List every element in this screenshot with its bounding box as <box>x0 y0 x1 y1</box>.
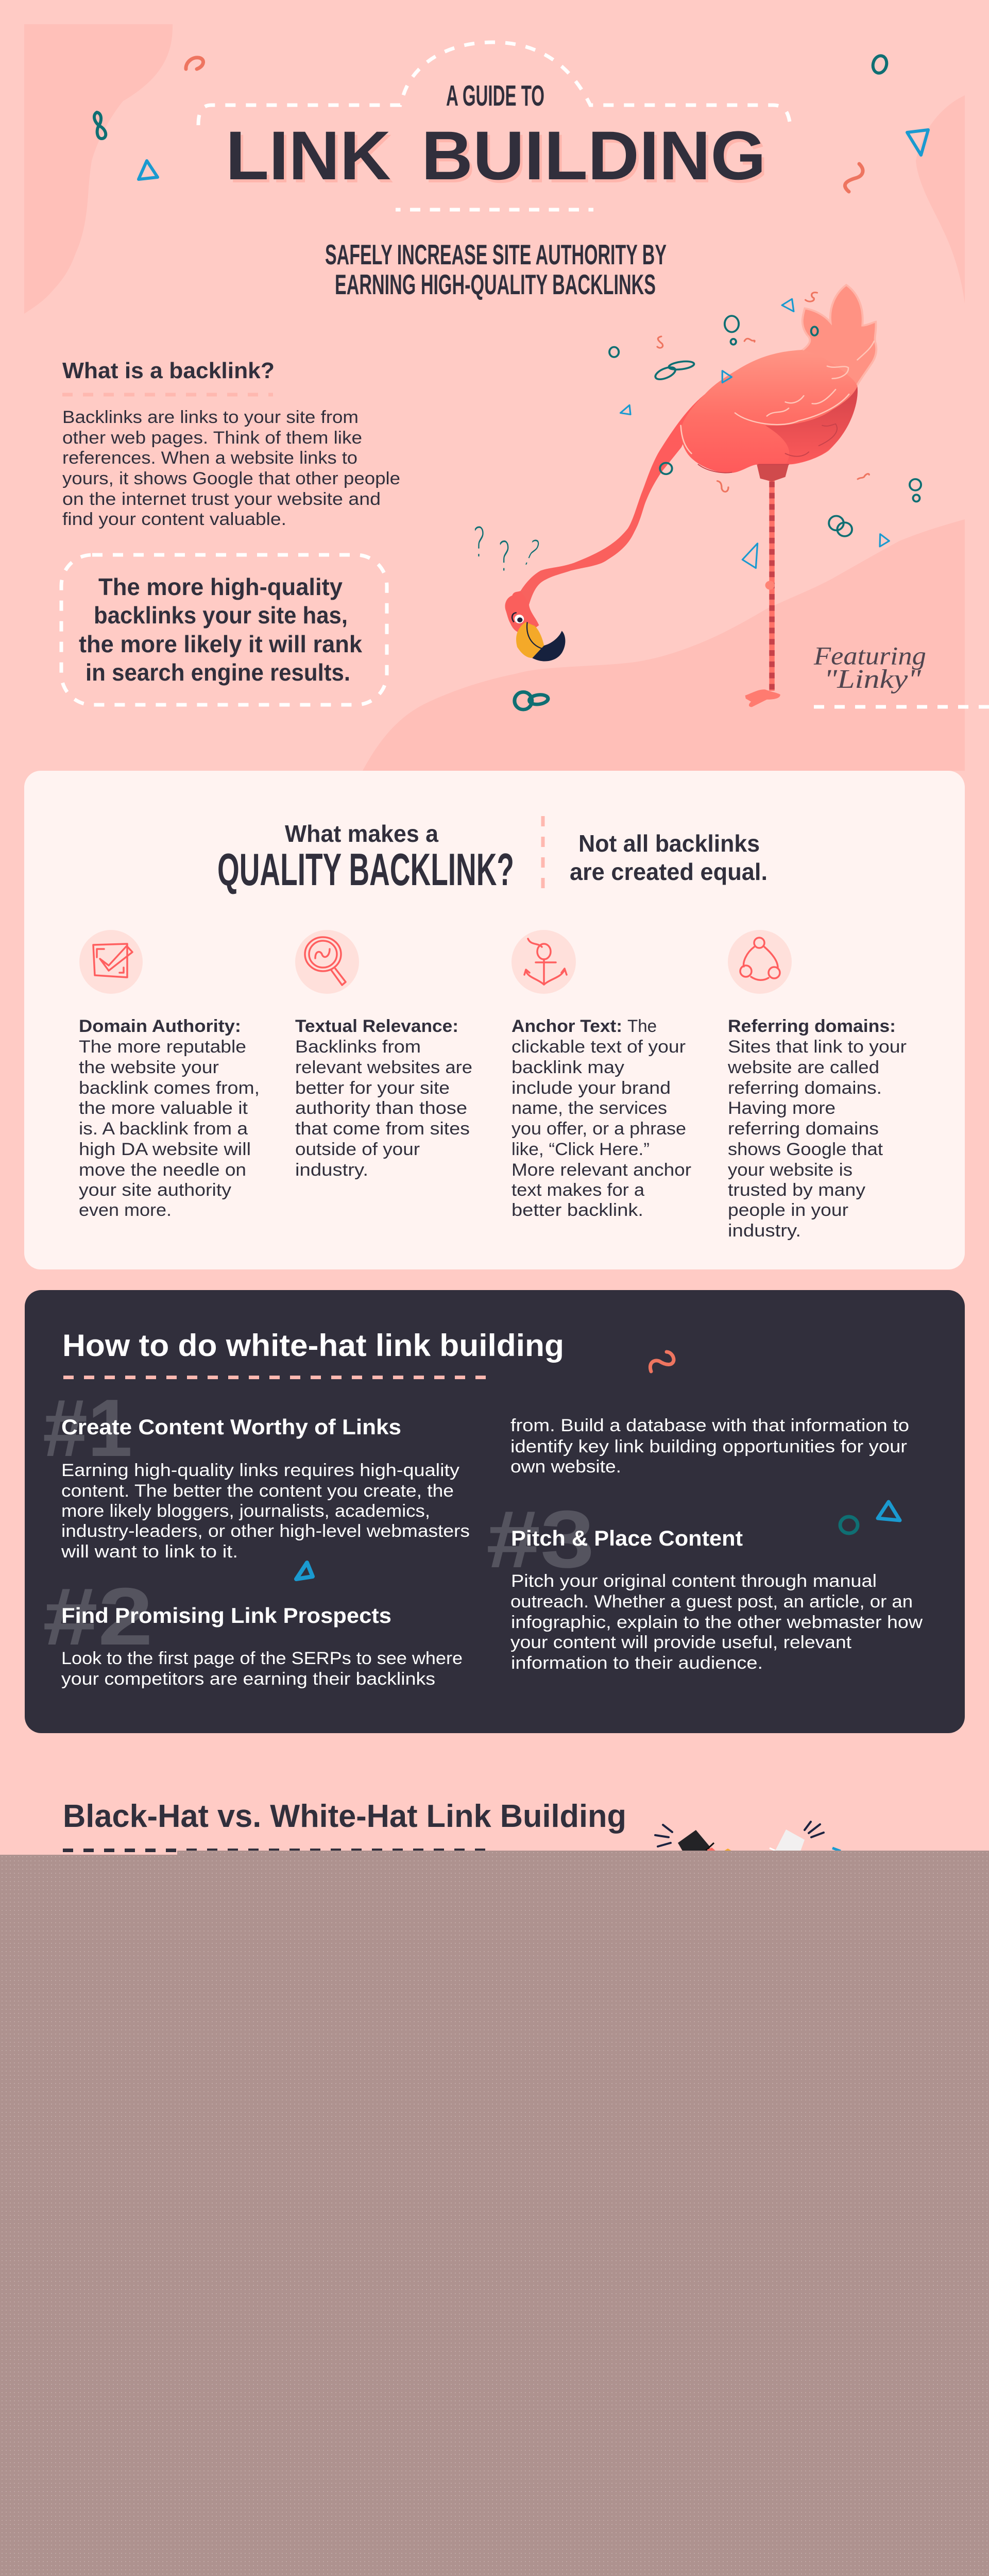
dashed title frame <box>198 42 790 125</box>
decorative blob: top right <box>916 95 965 303</box>
panel: how to do white-hat link building <box>25 1290 965 1733</box>
step 2 text <box>61 1416 909 1689</box>
heading: link building: LINK <box>226 117 391 194</box>
text: anchor text: better backlink. <box>511 1200 643 1220</box>
icon: referring domains network <box>728 930 792 994</box>
question marks: ? <box>518 532 545 575</box>
side note <box>570 830 768 885</box>
decorative blob: bottom right hill <box>363 519 965 771</box>
text: textual relevance: Textual Relevance: <box>295 1016 458 1036</box>
icon: anchor <box>511 930 576 994</box>
text: referring domains: referring domains. <box>728 1078 882 1098</box>
text: textual relevance: Backlinks from <box>295 1037 421 1057</box>
signature: featuring Linky: Featuring <box>813 642 926 670</box>
question marks <box>473 519 545 581</box>
step 2 text: your competitors are earning their backlinks <box>61 1669 435 1689</box>
text: textual relevance: that come from sites <box>295 1119 470 1139</box>
beak <box>516 622 565 661</box>
unrendered lower area <box>0 1851 989 2576</box>
title block <box>198 42 790 300</box>
heading: link building: BUILDING <box>421 117 766 194</box>
step 1 text: more likely bloggers, journalists, academics, <box>61 1501 430 1521</box>
text: domain authority: high DA website will <box>79 1140 251 1159</box>
dashed title rule <box>396 208 593 211</box>
step 1 heading: Create Content Worthy of Links <box>61 1415 401 1439</box>
text: domain authority: the more valuable it <box>79 1098 248 1118</box>
text: domain authority: is. A backlink from a <box>79 1119 248 1139</box>
step 1 text: Earning high-quality links requires high-quality <box>61 1461 459 1480</box>
illustration: flamingo Linky <box>473 285 926 709</box>
text: referring domains: shows Google that <box>728 1140 883 1159</box>
heading: quality backlink: QUALITY BACKLINK? <box>217 844 514 895</box>
step 1 text: will want to link to it. <box>61 1542 238 1562</box>
text: textual relevance: outside of your <box>295 1140 420 1159</box>
text: textual relevance <box>295 1016 472 1180</box>
what is a backlink <box>62 358 400 529</box>
question marks: ? <box>498 534 511 581</box>
head <box>505 591 539 633</box>
text: anchor text <box>511 1016 691 1220</box>
eye <box>512 613 524 623</box>
heading: How to do white-hat link building <box>62 1328 564 1363</box>
text: referring domains: industry. <box>728 1221 801 1241</box>
text: domain authority: your site authority <box>79 1180 231 1200</box>
text: textual relevance: better for your site <box>295 1078 450 1098</box>
panel: quality backlink <box>24 771 965 1269</box>
description: other web pages. Think of them like <box>62 428 362 448</box>
step 3 text: Pitch your original content through manual <box>511 1571 877 1591</box>
step 3 text <box>510 1571 923 1673</box>
callout: more backlinks: backlinks your site has, <box>94 602 348 629</box>
text: referring domains: Having more <box>728 1098 835 1118</box>
signature: featuring Linky: "Linky" <box>824 664 921 693</box>
icon: domain authority checklist <box>79 930 143 994</box>
text: domain authority: The more reputable <box>79 1037 246 1057</box>
text: anchor text: Anchor Text: <box>511 1016 622 1036</box>
step 3 text: outreach. Whether a guest post, an article, or an <box>510 1592 913 1612</box>
number 2: #2 <box>43 1571 153 1662</box>
leg <box>745 479 780 707</box>
dashed divider <box>541 816 545 888</box>
header doodles <box>94 54 928 192</box>
text: anchor text: clickable text of your <box>511 1037 686 1057</box>
text: anchor text: The <box>627 1016 657 1036</box>
number 1: #1 <box>43 1383 132 1473</box>
text: referring domains: people in your <box>728 1200 848 1220</box>
text: referring domains <box>727 1016 907 1241</box>
dashed rule: black-hat section <box>63 1849 486 1852</box>
hip <box>757 464 789 482</box>
step 2 text: from. Build a database with that information to <box>510 1416 909 1435</box>
callout: more backlinks: The more high-quality <box>98 573 343 600</box>
doodles: squiggles <box>657 293 869 492</box>
description: find your content valuable. <box>62 510 286 529</box>
text: domain authority: Domain Authority: <box>79 1016 241 1036</box>
heading: link building: LINK <box>228 121 394 197</box>
callout: more backlinks: in search engine results. <box>86 659 350 686</box>
step 3 text: information to their audience. <box>511 1653 763 1673</box>
description: yours, it shows Google that other people <box>62 469 400 488</box>
step 1 text <box>61 1461 470 1562</box>
decorative blob: top left <box>24 24 173 314</box>
doodles: rings <box>515 316 921 709</box>
step 3 text: your content will provide useful, relevant <box>510 1633 852 1652</box>
text: textual relevance: industry. <box>295 1160 368 1180</box>
doodles: triangles <box>620 299 889 568</box>
under-wing lines <box>698 424 837 473</box>
illustration: black hat <box>655 1825 735 1853</box>
step 2 heading: Find Promising Link Prospects <box>61 1603 391 1628</box>
description: references. When a website links to <box>62 448 357 468</box>
doodles <box>296 1352 900 1579</box>
text: anchor text: More relevant anchor <box>511 1160 691 1180</box>
step 1 text: content. The better the content you create, the <box>61 1481 454 1501</box>
feather lines <box>681 341 874 453</box>
neck <box>521 394 705 605</box>
subtitle <box>325 239 667 300</box>
description: Backlinks are links to your site from <box>62 408 359 427</box>
text: anchor text: you offer, or a phrase <box>511 1119 686 1139</box>
text: referring domains: Referring domains: <box>728 1016 896 1036</box>
question marks: ? <box>473 519 486 567</box>
step 3 text: infographic, explain to the other webmaster how <box>511 1613 923 1632</box>
step 2 text: Look to the first page of the SERPs to see where <box>61 1649 463 1668</box>
icon: textual relevance magnifier <box>295 930 359 994</box>
text: textual relevance: relevant websites are <box>295 1058 472 1077</box>
text: anchor text: like, “Click Here.” <box>511 1140 650 1159</box>
text: domain authority: move the needle on <box>79 1160 246 1180</box>
heading: link building: BUILDING <box>424 121 769 197</box>
subtitle: EARNING HIGH-QUALITY BACKLINKS <box>335 268 656 300</box>
body <box>681 350 857 473</box>
side note: Not all backlinks <box>578 830 760 857</box>
heading: what makes a: What makes a <box>285 820 438 847</box>
text: referring domains: trusted by many <box>728 1180 865 1200</box>
text: anchor text: name, the services <box>511 1098 667 1118</box>
text: domain authority: backlink comes from, <box>79 1078 260 1098</box>
text: domain authority: even more. <box>79 1200 172 1220</box>
step 1 text: industry-leaders, or other high-level webmasters <box>61 1521 470 1541</box>
heading: a guide to: A GUIDE TO <box>446 79 544 112</box>
dashed rule: right <box>814 705 989 709</box>
text: anchor text: text makes for a <box>511 1180 644 1200</box>
dark under-wing <box>765 386 858 464</box>
description <box>62 408 400 529</box>
text: domain authority <box>79 1016 260 1220</box>
callout: more backlinks: the more likely it will rank <box>79 631 362 657</box>
subtitle: SAFELY INCREASE SITE AUTHORITY BY <box>325 239 667 270</box>
side note: are created equal. <box>570 858 768 885</box>
text: referring domains: referring domains <box>728 1119 879 1139</box>
text: referring domains: Sites that link to your <box>728 1037 907 1057</box>
heading: What is a backlink? <box>62 358 275 383</box>
dashed rule <box>62 393 273 397</box>
signature: featuring Linky <box>813 642 926 693</box>
heading: link building <box>226 117 769 197</box>
callout: more backlinks <box>61 555 387 705</box>
text: domain authority: the website your <box>79 1058 219 1077</box>
step 2 text: identify key link building opportunities for your <box>510 1437 907 1456</box>
text: referring domains: website are called <box>727 1058 879 1077</box>
step 2 text: own website. <box>510 1457 621 1477</box>
text: textual relevance: authority than those <box>295 1098 467 1118</box>
text: anchor text: include your brand <box>511 1078 671 1098</box>
tail feathers <box>802 285 876 386</box>
dashed rule <box>63 1376 487 1379</box>
illustration: white hat <box>770 1822 841 1853</box>
description: on the internet trust your website and <box>62 489 381 509</box>
heading: black-hat vs white-hat: Black-Hat vs. White-Hat Link Building <box>63 1799 626 1834</box>
number 3: #3 <box>486 1494 594 1585</box>
text: anchor text: backlink may <box>511 1058 624 1077</box>
text: referring domains: your website is <box>728 1160 852 1180</box>
step 3 heading: Pitch & Place Content <box>511 1526 743 1550</box>
